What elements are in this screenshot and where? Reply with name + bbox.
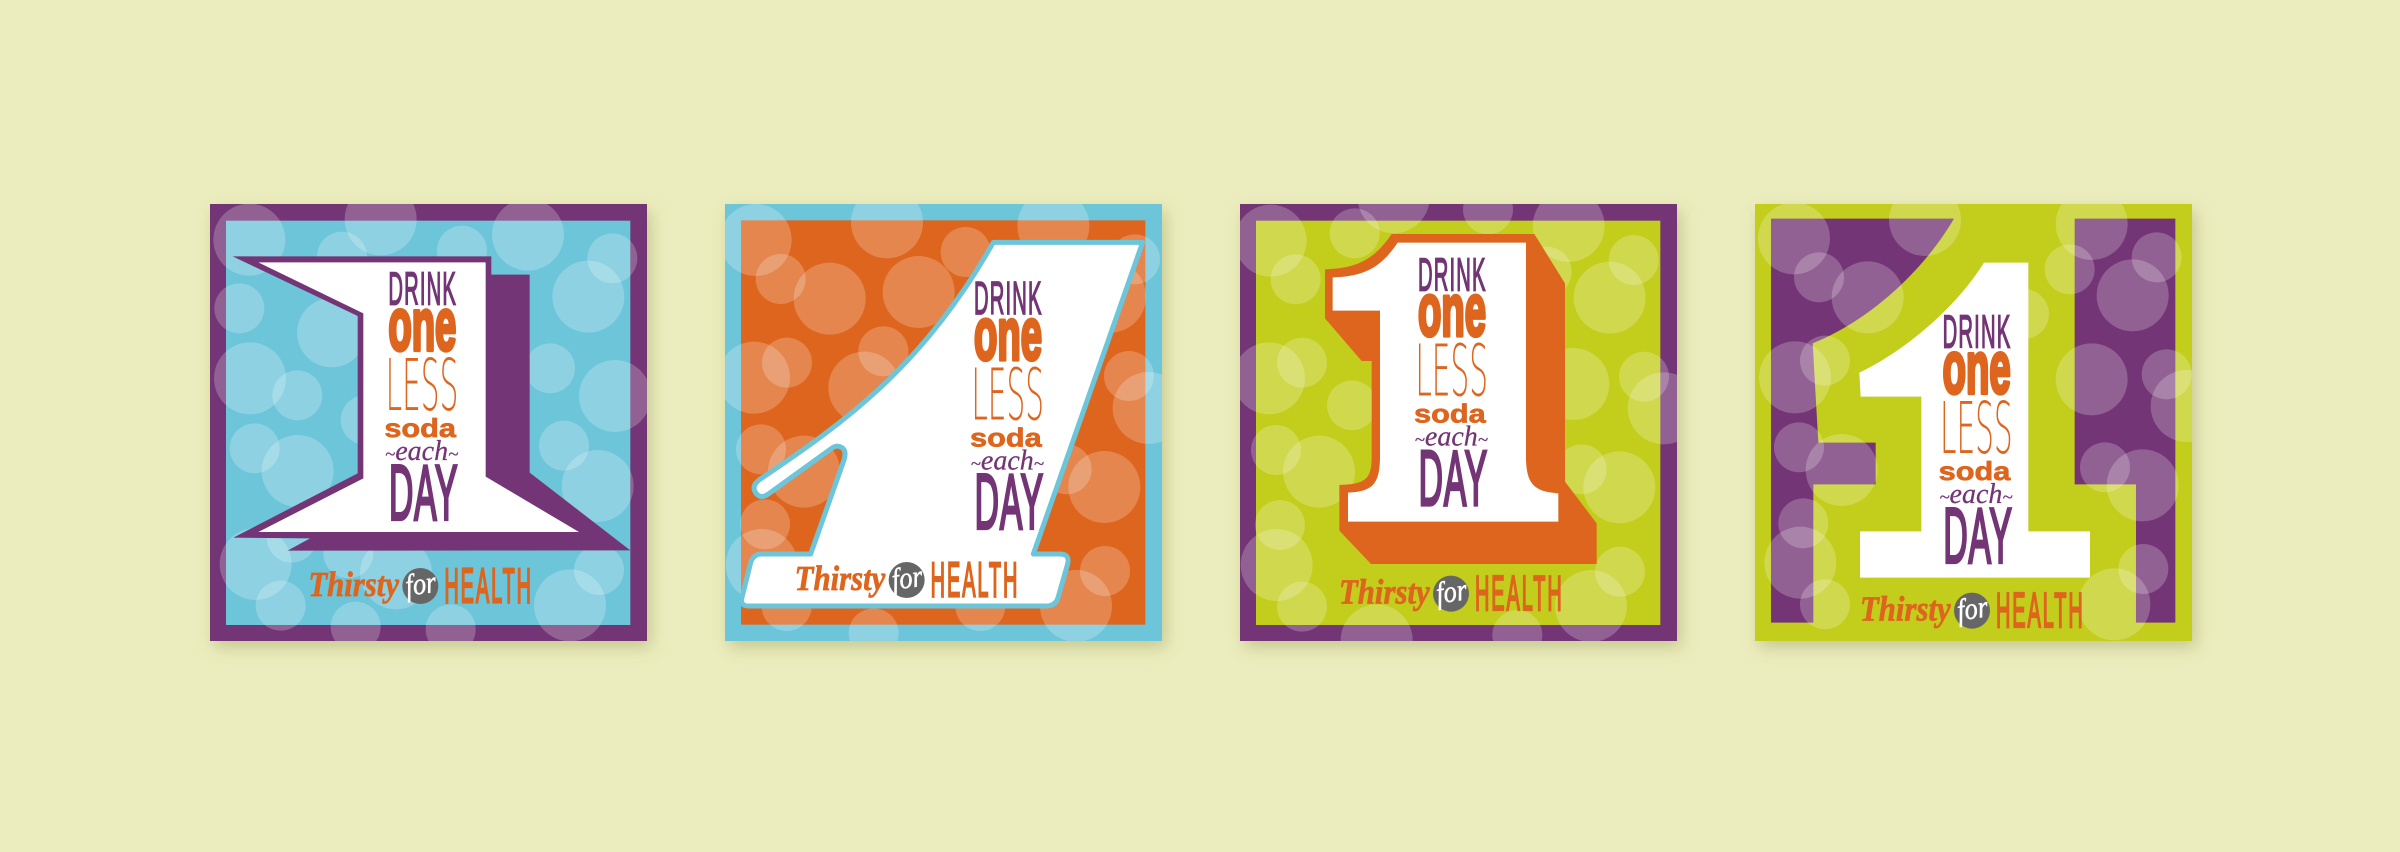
number 1 shadow and outline <box>233 256 630 551</box>
number 1 white face <box>1859 263 2090 578</box>
slogan text: soda <box>1939 456 2011 486</box>
slogan text: one <box>1418 270 1486 352</box>
panel: card 2 orange with blue border: LESS <box>971 352 1044 436</box>
slogan text: ~each~ <box>1939 478 2013 510</box>
logo: Thirsty for Health <box>795 552 1019 607</box>
panel: card 1 blue with purple border <box>210 183 651 654</box>
number 1 white face <box>1333 243 1558 522</box>
slogan text: one <box>974 293 1042 375</box>
logo: Thirsty for Health: Thirsty <box>1339 574 1430 612</box>
slogan text: one <box>1943 327 2011 409</box>
panel: card 4 lime with purple negative space: DRINK <box>1943 306 2011 358</box>
logo: Thirsty for Health: for <box>889 559 925 597</box>
panel: card 2 orange with blue border: DRINK <box>974 272 1043 324</box>
slogan text: soda <box>1414 399 1486 429</box>
slogan text: one <box>388 284 456 366</box>
panel: card 3 lime with purple border: DRINK <box>1418 248 1487 300</box>
logo: Thirsty for Health: Thirsty <box>308 566 400 604</box>
slogan text <box>1414 248 1489 522</box>
slogan text <box>384 263 459 536</box>
panel: card 4 lime with purple negative space: LESS <box>1940 386 2013 470</box>
panel: card 1 blue with purple border: DRINK <box>388 263 457 315</box>
logo: Thirsty for Health: Thirsty <box>795 560 886 598</box>
slogan text <box>1939 306 2013 579</box>
slogan text: soda <box>970 422 1042 452</box>
logo: Thirsty for Health <box>308 558 533 613</box>
panel: card 3 lime with purple border <box>1236 202 1689 656</box>
panel: card 2 orange with blue border <box>718 186 1185 658</box>
slogan text: ~each~ <box>1415 421 1489 453</box>
slogan text: ~each~ <box>385 435 459 467</box>
logo: Thirsty for Health: for <box>1434 572 1470 611</box>
panel: card 3 lime with purple border: HEALTH <box>1475 566 1564 621</box>
panel: card 1 blue with purple border: DAY <box>389 448 458 536</box>
panel: card 4 lime with purple negative space: HEALTH <box>1996 583 2085 638</box>
number 1 orange extrusion <box>1325 234 1597 564</box>
panel: card 3 lime with purple border: DAY <box>1419 434 1488 522</box>
slogan text: soda <box>384 413 457 443</box>
infographic: four Drink One Less Soda cards <box>206 202 2204 656</box>
logo: Thirsty for Health: for <box>403 565 439 603</box>
slogan text: ~each~ <box>971 444 1045 476</box>
panel: card 2 orange with blue border: DAY <box>975 458 1044 546</box>
panel: card 2 orange with blue border: HEALTH <box>931 552 1019 607</box>
panel: card 3 lime with purple border: LESS <box>1415 329 1488 413</box>
panel: card 1 blue with purple border: LESS <box>386 343 458 427</box>
logo: Thirsty for Health <box>1339 566 1564 621</box>
number 1 white face <box>258 262 579 532</box>
panel: card 4 lime with purple negative space: DAY <box>1943 491 2013 579</box>
logo: Thirsty for Health: Thirsty <box>1860 591 1951 629</box>
slogan text <box>970 272 1045 546</box>
panel: card 4 lime with purple negative space <box>1755 184 2223 648</box>
logo: Thirsty for Health <box>1860 583 2085 638</box>
logo: Thirsty for Health: for <box>1955 589 1991 628</box>
slanted number 1 with blue outline <box>742 242 1143 606</box>
panel: card 1 blue with purple border: HEALTH <box>444 558 533 613</box>
